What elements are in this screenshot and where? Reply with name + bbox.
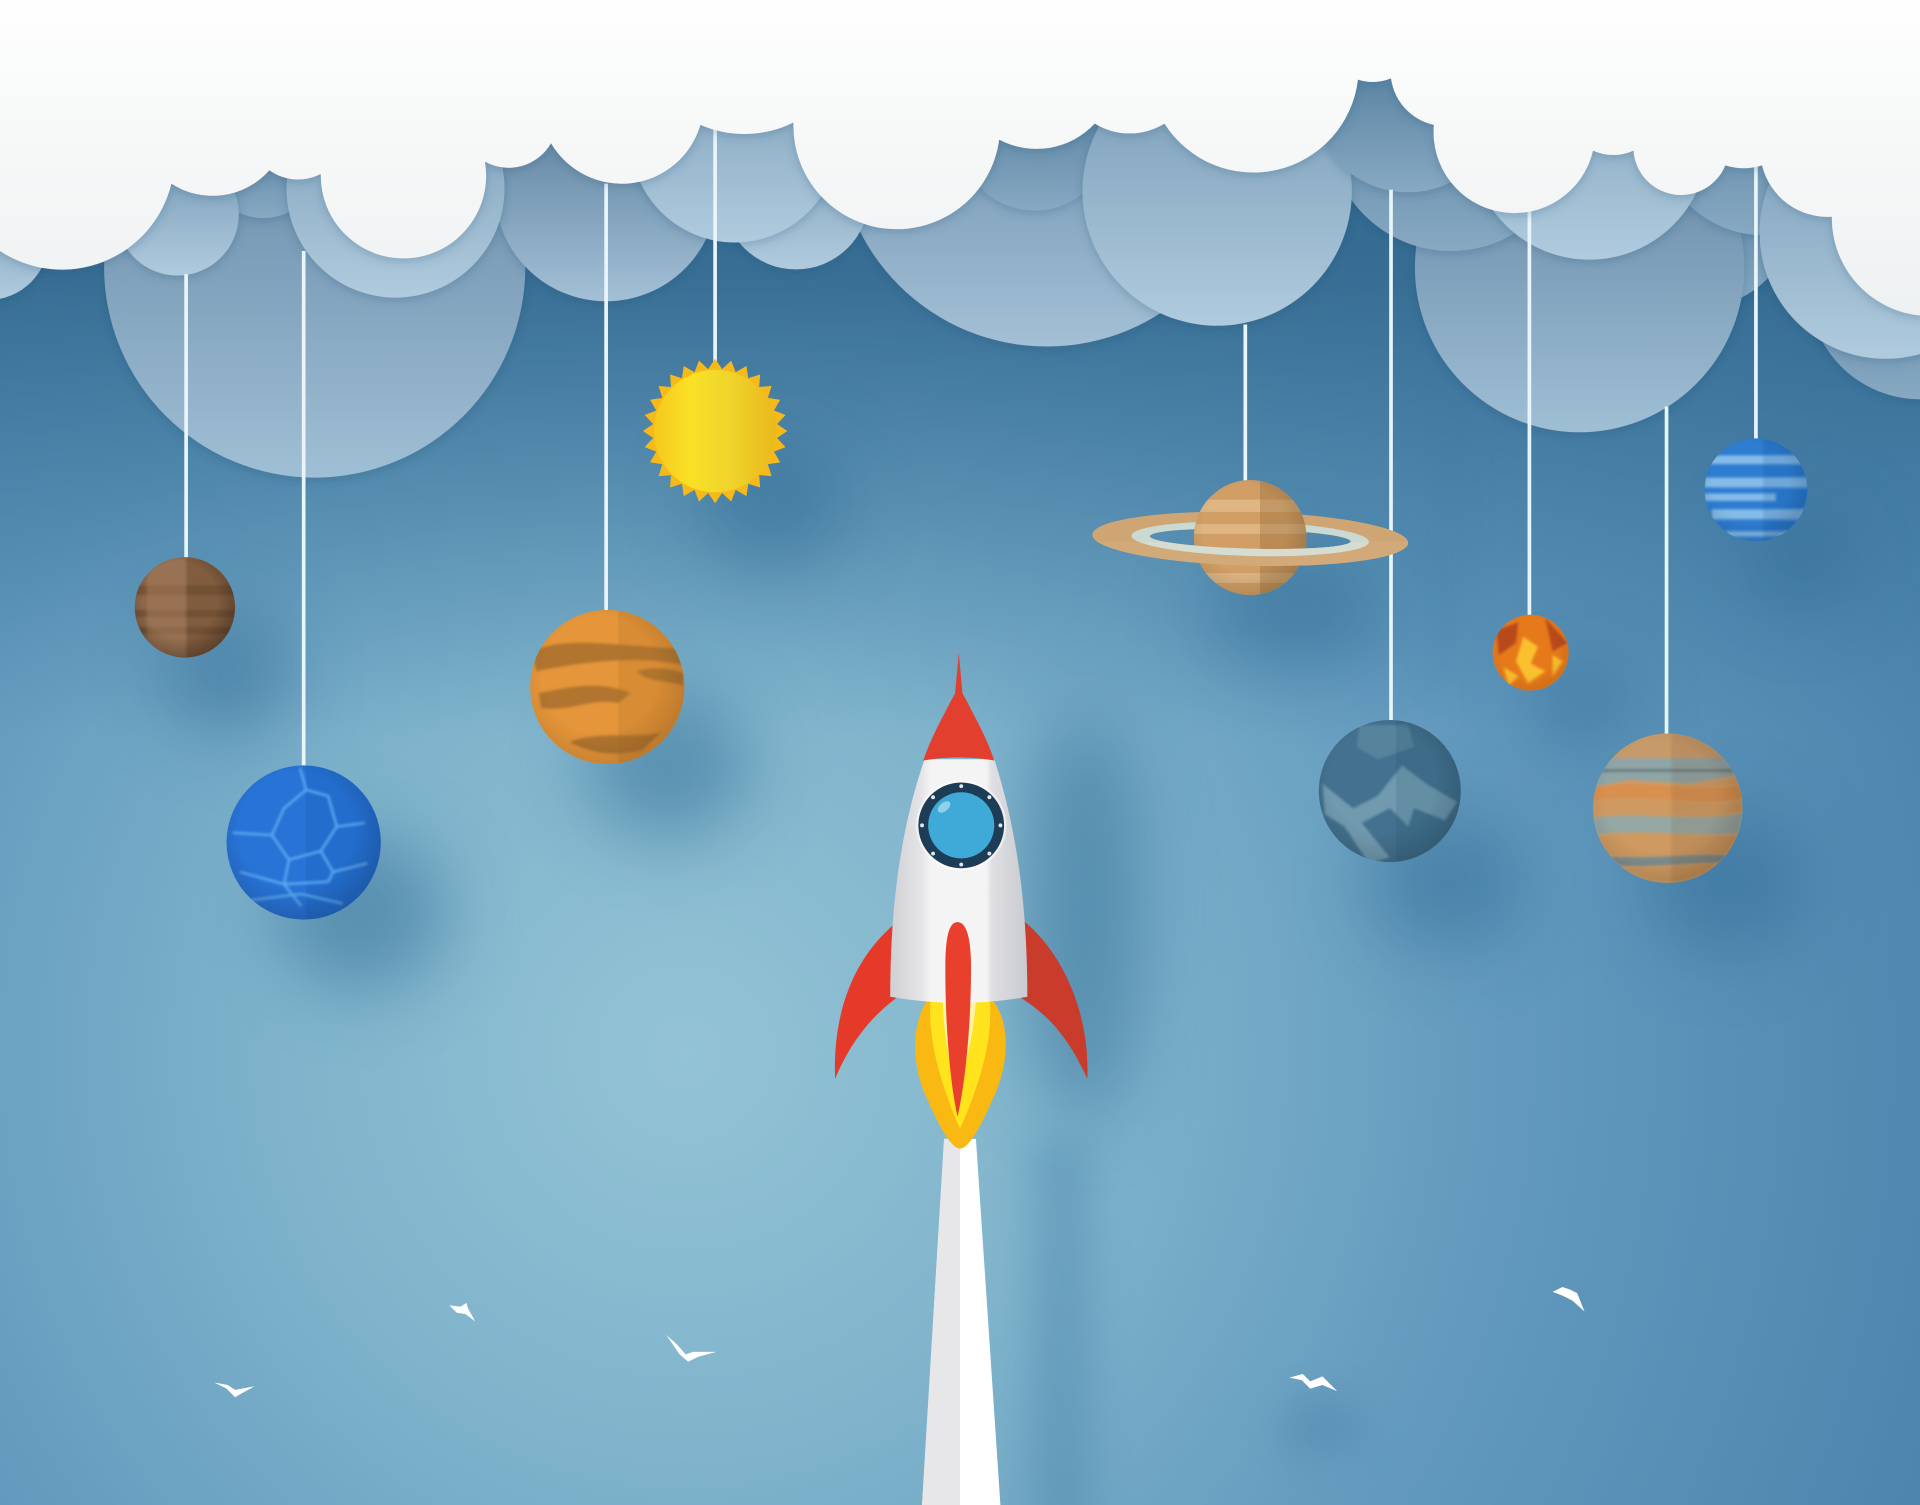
rocket flame bbox=[915, 999, 1006, 1149]
rocket red nose cone bbox=[923, 653, 994, 760]
bird bbox=[1553, 1287, 1584, 1312]
clouds: front white paper layer bbox=[0, 0, 1920, 316]
rocket left fin bbox=[835, 925, 896, 1079]
planet: grey-blue neptune bbox=[1319, 720, 1463, 863]
rocket exhaust trail bbox=[922, 1139, 1000, 1505]
bird bbox=[1289, 1374, 1337, 1391]
planet: blue earth with cracks bbox=[227, 765, 383, 920]
rocket porthole bbox=[916, 780, 1007, 871]
planet: orange venus bbox=[530, 610, 692, 764]
rocket center stripe bbox=[945, 922, 971, 1117]
planet: brown mercury bbox=[135, 557, 235, 658]
bird bbox=[449, 1303, 475, 1321]
bird bbox=[666, 1335, 716, 1362]
rocket bbox=[835, 653, 1088, 1149]
flock of birds bbox=[214, 1287, 1584, 1397]
hanging strings bbox=[186, 127, 1756, 769]
planet: small red-orange mars bbox=[1493, 615, 1569, 691]
rocket right fin bbox=[1021, 921, 1088, 1079]
soft shadows of planets and rocket bbox=[163, 367, 1856, 1505]
planet: saturn with ring bbox=[1092, 480, 1409, 596]
sun with spikes bbox=[628, 344, 802, 518]
planet: striped blue uranus bbox=[1704, 438, 1812, 541]
rocket body bbox=[890, 759, 1027, 1003]
clouds: back paper layers bbox=[0, 0, 1920, 478]
bird bbox=[214, 1383, 255, 1397]
planet: banded jupiter bbox=[1592, 734, 1745, 883]
